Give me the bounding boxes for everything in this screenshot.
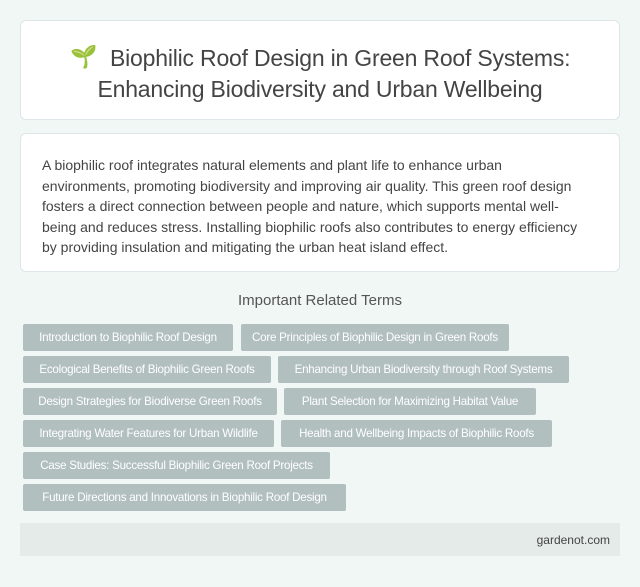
tag: Design Strategies for Biodiverse Green Roofs [38,395,262,408]
description text: A biophilic roof integrates natural elements and plant life to enhance urban environments, promoting biodiversity and improving air quality. This green roof design fosters a direct connection between people and nature, which supports mental well-being and reduces stress. Installing biophilic roofs also contributes to energy efficiency by providing insulation and mitigating the urban heat island effect. [42,157,577,255]
tag: Integrating Water Features for Urban Wildlife [39,427,258,440]
title: Enhancing Biodiversity and Urban Wellbeing [97,76,543,102]
tag: Health and Wellbeing Impacts of Biophilic Roofs [299,427,534,440]
tag [23,484,346,511]
tag: Case Studies: Successful Biophilic Green Roof Projects [40,459,313,472]
footer credit: gardenot.com [537,533,610,547]
tag: Plant Selection for Maximizing Habitat Value [302,395,518,408]
tag [23,420,274,447]
heading: related terms: Important Related Terms [238,292,402,309]
tag [23,388,277,415]
tag [23,324,233,351]
tag [23,452,330,479]
title: Biophilic Roof Design in Green Roof Systems: [110,45,570,71]
header panel [20,20,620,120]
tag [281,420,552,447]
title [70,44,570,102]
tag: Core Principles of Biophilic Design in Green Roofs [252,331,498,344]
tag: Future Directions and Innovations in Biophilic Roof Design [42,491,327,504]
tag [23,356,271,383]
tag: Enhancing Urban Biodiversity through Roof Systems [295,363,552,376]
tag: Introduction to Biophilic Roof Design [39,331,217,344]
tag [278,356,569,383]
tag: Ecological Benefits of Biophilic Green Roofs [39,363,255,376]
tag [284,388,536,415]
tag [241,324,509,351]
description panel [20,133,620,272]
icon: seedling: 🌱 [70,44,97,69]
footer [20,523,620,556]
